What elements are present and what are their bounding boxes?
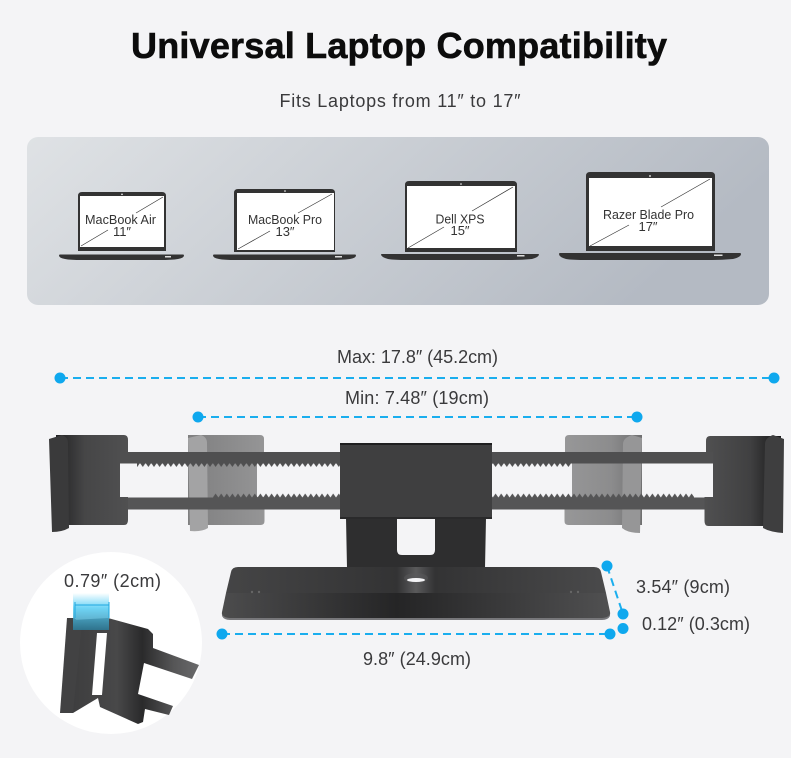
icon: MacBook Air 11 inch laptop: [59, 192, 184, 260]
icon: MacBook Air 11 inch laptop: MacBook Air: [85, 212, 157, 227]
subtitle: Fits Laptops from 11″ to 17″: [280, 91, 521, 111]
ghost clip plate: right, minimum position: [564, 435, 642, 525]
central clamp block: [340, 443, 492, 519]
ghost clip lip: right: [622, 435, 642, 533]
base width label: 9.8″ (24.9cm): [363, 649, 471, 669]
dimension line: base depth: [602, 560, 628, 620]
ghost clip lip: left: [188, 435, 208, 531]
min width label: Min: 7.48″ (19cm): [345, 388, 489, 408]
icon: Dell XPS 15 inch laptop: [381, 181, 539, 260]
icon: MacBook Pro 13 inch laptop: 13″: [275, 224, 295, 239]
icon: Razer Blade Pro 17 inch laptop: [559, 172, 741, 260]
inset: clip detail: [20, 552, 202, 734]
thickness label: 0.12″ (0.3cm): [642, 614, 750, 634]
base plate: [222, 567, 610, 620]
ghost clip plate: left, minimum position: [188, 435, 264, 525]
inset circle: [20, 552, 202, 734]
icon: MacBook Air 11 inch laptop: 11″: [113, 224, 131, 239]
icon: Razer Blade Pro 17 inch laptop: Razer Blade Pro: [603, 207, 694, 222]
max width label: Max: 17.8″ (45.2cm): [337, 347, 498, 367]
icon: Dell XPS 15 inch laptop: Dell XPS: [436, 212, 485, 226]
title: Universal Laptop Compatibility: [131, 25, 667, 66]
icon: MacBook Pro 13 inch laptop: MacBook Pro: [248, 212, 322, 227]
right clip: [704, 435, 784, 533]
icon: Razer Blade Pro 17 inch laptop: 17″: [638, 219, 658, 234]
support arm: [346, 518, 486, 568]
dimension line: min width: [192, 412, 642, 422]
dimension dot: base thickness: [618, 623, 628, 634]
depth label: 3.54″ (9cm): [636, 577, 730, 597]
left clip: [49, 435, 128, 532]
icon: MacBook Pro 13 inch laptop: [213, 189, 356, 260]
product: stand front view: [49, 435, 784, 620]
highlight: lip depth: [73, 593, 109, 630]
lip depth label: 0.79″ (2cm): [64, 571, 161, 591]
rails: [120, 452, 714, 510]
clip back plate with rails: [73, 618, 199, 724]
panel: laptop sizes: [27, 137, 769, 305]
clip front lip: [60, 618, 82, 713]
icon: Dell XPS 15 inch laptop: 15″: [450, 223, 470, 238]
dimension line: base width: [216, 628, 616, 640]
dimension line: max width: [54, 372, 780, 384]
